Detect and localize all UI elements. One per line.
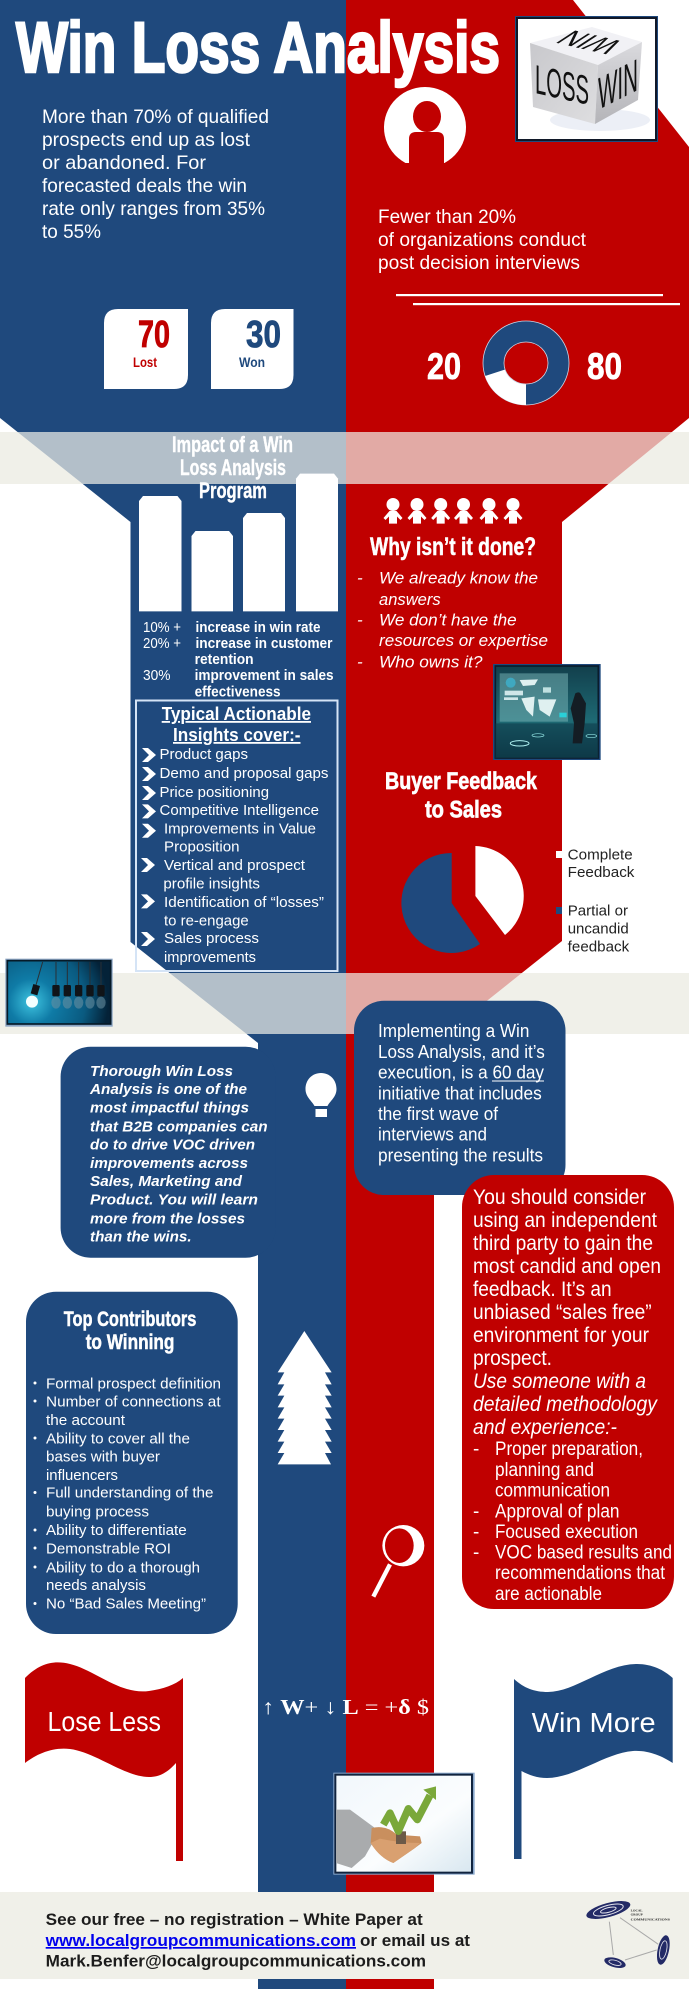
heading: impact program: Loss Analysis <box>180 455 286 480</box>
list: reasons: - <box>357 611 363 630</box>
text: impact percentages <box>143 620 334 700</box>
callout: independent third party: most candid and open <box>473 1255 661 1278</box>
text: impact percentages: 20% + <box>143 636 181 652</box>
text: post decision interviews: post decision interviews <box>378 252 580 274</box>
logo: local group communications <box>585 1897 672 1970</box>
callout: independent third party: planning and <box>495 1460 594 1481</box>
funnel: blue side <box>0 0 346 1989</box>
list: contributors: buying process <box>46 1504 149 1521</box>
list: insights <box>160 746 328 966</box>
text: post decision interviews: of organizations conduct <box>378 229 587 251</box>
intro text: lost prospects: prospects end up as lost <box>42 129 251 151</box>
callout: implementing timeline: interviews and <box>378 1125 487 1145</box>
panel: top contributors to winning <box>26 1292 238 1634</box>
legend: pie chart: Complete <box>568 847 633 864</box>
heading: impact program <box>172 432 293 503</box>
funnel: red side <box>346 0 689 1989</box>
callout: independent third party: You should consider <box>473 1186 646 1209</box>
intro text: lost prospects: to 55% <box>42 221 101 243</box>
list: reasons: answers <box>379 590 441 609</box>
callout: independent third party: Use someone with a <box>473 1370 646 1393</box>
flag: lose less: Lose Less <box>48 1706 161 1737</box>
callout: independent third party: are actionable <box>495 1584 602 1605</box>
list: insights: profile insights <box>163 876 260 893</box>
list: reasons: Who owns it? <box>379 652 483 672</box>
callout: independent third party: - <box>473 1439 479 1460</box>
callout: implementing timeline: initiative that includes <box>378 1083 542 1103</box>
text: post decision interviews <box>378 206 587 274</box>
list: reasons: We already know the <box>379 569 538 588</box>
flag: win more <box>514 1664 673 1859</box>
footer text: www.localgroupcommunications.com <box>45 1931 356 1950</box>
callout: independent third party: third party to gain the <box>473 1232 653 1255</box>
callout: independent third party: using an independent <box>473 1209 657 1232</box>
background bands <box>0 432 689 1034</box>
callout: implementing timeline <box>354 1001 566 1195</box>
text: impact percentages: effectiveness <box>195 684 281 700</box>
stat card: 30 won: Won <box>239 354 265 370</box>
callout: thorough win loss analysis: Thorough Win Loss <box>90 1064 233 1080</box>
callout: implementing timeline: execution, is a 60 day <box>378 1063 544 1083</box>
image: row of light bulbs <box>5 959 113 1027</box>
pie chart: buyer feedback <box>401 846 524 953</box>
list: reasons <box>357 569 548 672</box>
list: reasons: We don’t have the <box>379 611 517 630</box>
footer band <box>0 1892 689 1979</box>
legend: pie chart: feedback <box>568 938 630 955</box>
list: insights: Identification of “losses” <box>164 894 324 911</box>
callout: thorough win loss analysis: than the wins. <box>90 1229 192 1245</box>
list: reasons: - <box>357 652 363 672</box>
panel: typical actionable insights <box>136 700 338 971</box>
list: insights: improvements <box>164 949 256 966</box>
intro text: lost prospects: forecasted deals the win <box>42 175 247 197</box>
callout: independent third party: - <box>473 1501 479 1522</box>
list: contributors: Ability to do a thorough <box>46 1559 200 1576</box>
heading: typical actionable insights: Typical Actionable <box>162 704 311 724</box>
heading: buyer feedback to sales <box>385 768 538 824</box>
text: post decision interviews: Fewer than 20% <box>378 206 516 228</box>
heading: top contributors <box>64 1308 196 1354</box>
callout: independent third party: communication <box>495 1481 610 1502</box>
heading: typical actionable insights: Insights cover:- <box>173 725 300 745</box>
icon: row of people <box>384 498 522 524</box>
callout: implementing timeline: Implementing a Win <box>378 1021 529 1041</box>
text: impact percentages: improvement in sales <box>195 668 334 684</box>
image: hands holding growth arrow plant <box>333 1773 475 1875</box>
callout: independent third party: Approval of plan <box>495 1501 620 1522</box>
image: win loss dice: LOSS <box>535 58 589 115</box>
legend: pie chart <box>556 847 635 955</box>
footer text: See our free – no registration – White Paper at <box>46 1910 423 1929</box>
title: Win Loss Analysis <box>16 9 500 88</box>
flag: lose less <box>25 1662 183 1861</box>
list: insights: Vertical and prospect <box>164 857 306 874</box>
intro text: lost prospects: or abandoned. For <box>42 152 207 174</box>
translucent bands over funnel <box>0 432 689 1034</box>
list: contributors: Number of connections at <box>46 1393 221 1410</box>
callout: independent third party: Focused execution <box>495 1522 638 1543</box>
list: contributors: Ability to cover all the <box>46 1430 190 1447</box>
callout: thorough win loss analysis: improvements across <box>90 1156 248 1172</box>
callout: independent third party: prospect. <box>473 1347 552 1370</box>
list: insights: Price positioning <box>160 784 269 801</box>
list: insights: Proposition <box>164 838 240 855</box>
text: impact percentages: increase in customer <box>196 636 333 652</box>
callout: independent third party: Proper preparation, <box>495 1439 643 1460</box>
callout: thorough win loss analysis: do to drive VOC driven <box>90 1137 255 1153</box>
chevron bullets <box>141 748 156 946</box>
heading: impact program: Impact of a Win <box>172 432 293 457</box>
list: insights: Improvements in Value <box>164 821 316 838</box>
callout: independent third party: unbiased “sales free” <box>473 1301 652 1324</box>
footer text: or email us at <box>360 1931 470 1950</box>
list: contributors <box>34 1375 221 1613</box>
logo: local group communications: LOCAL <box>631 1909 643 1913</box>
icon: up arrow tree <box>278 1331 332 1464</box>
callout: independent third party: feedback. It’s an <box>473 1278 612 1301</box>
stat card: 70 lost: 70 <box>138 314 170 356</box>
callout: thorough win loss analysis <box>61 1047 276 1258</box>
list: contributors: bases with buyer <box>46 1449 160 1466</box>
stat card: 70 lost <box>104 309 188 389</box>
stat card: 70 lost: Lost <box>133 354 157 370</box>
legend: pie chart: Feedback <box>568 864 635 881</box>
list: contributors: Ability to differentiate <box>46 1522 187 1539</box>
bar chart <box>139 474 338 611</box>
callout: independent third party: detailed methodology <box>473 1393 658 1416</box>
text: impact percentages: 10% + <box>143 620 181 636</box>
callout: implementing timeline: the first wave of <box>378 1104 499 1124</box>
logo: local group communications: GROUP <box>631 1913 643 1917</box>
list: insights: Product gaps <box>160 746 248 763</box>
list: insights: Competitive Intelligence <box>160 802 319 819</box>
logo: local group communications: COMMUNICATIONS <box>631 1917 670 1921</box>
icon: magnifying glass <box>373 1525 424 1597</box>
list: contributors: Demonstrable ROI <box>46 1540 171 1557</box>
formula: ↑ W+ ↓ L = + δ $ <box>262 1695 429 1719</box>
intro text: lost prospects <box>42 106 269 243</box>
callout: independent third party: VOC based results and <box>495 1542 672 1563</box>
heading: impact program: Program <box>199 478 267 503</box>
list: contributors: influencers <box>46 1467 118 1484</box>
icon: light bulb <box>306 1073 336 1117</box>
list: contributors: needs analysis <box>46 1577 146 1594</box>
image: win loss dice: WIN <box>598 49 638 120</box>
callout: thorough win loss analysis: Analysis is one of the <box>89 1082 247 1098</box>
image: win loss dice: WIN <box>549 26 631 58</box>
flag: win more: Win More <box>532 1707 656 1738</box>
footer text: Mark.Benfer@localgroupcommunications.com <box>46 1952 426 1971</box>
callout: thorough win loss analysis: most impactful things <box>90 1101 249 1117</box>
donut chart: 20 / 80: 80 <box>587 346 622 387</box>
legend: pie chart: Partial or <box>568 903 628 920</box>
callout: implementing timeline: presenting the results <box>378 1145 543 1165</box>
list: contributors: Formal prospect definition <box>46 1375 221 1392</box>
list: insights: to re-engage <box>164 912 249 929</box>
callout: independent third party: and experience:- <box>473 1416 617 1439</box>
list: contributors: No “Bad Sales Meeting” <box>46 1596 206 1613</box>
stat card: 30 won: 30 <box>246 314 281 356</box>
list: insights: Sales process <box>164 930 259 947</box>
footer text <box>45 1910 470 1971</box>
image: data map and businessman <box>493 664 601 760</box>
image: win loss dice <box>515 16 658 142</box>
intro text: lost prospects: More than 70% of qualified <box>42 106 269 128</box>
callout: thorough win loss analysis: more from the losses <box>90 1211 245 1227</box>
callout: independent third party: recommendations that <box>495 1563 666 1584</box>
heading: why isn't it done: Why isn’t it done? <box>370 533 536 561</box>
heading: buyer feedback to sales: Buyer Feedback <box>385 768 538 795</box>
list: contributors: Full understanding of the <box>46 1485 214 1502</box>
list: insights: Demo and proposal gaps <box>160 765 328 782</box>
donut chart: 20 / 80: 20 <box>427 346 461 387</box>
icon: person <box>384 87 466 164</box>
callout: implementing timeline: Loss Analysis, and it’s <box>378 1042 545 1062</box>
callout: thorough win loss analysis: Sales, Marketing and <box>90 1174 243 1190</box>
heading: top contributors: to Winning <box>86 1331 174 1354</box>
list: reasons: - <box>357 569 363 588</box>
heading: top contributors: Top Contributors <box>64 1308 196 1331</box>
callout: independent third party: - <box>473 1542 479 1563</box>
callout: independent third party <box>462 1175 674 1609</box>
callout: independent third party: environment for your <box>473 1324 649 1347</box>
list: contributors: the account <box>46 1412 126 1429</box>
text: impact percentages: 30% <box>143 668 171 684</box>
text: impact percentages: retention <box>195 652 254 668</box>
callout: thorough win loss analysis: Product. You will learn <box>90 1193 258 1209</box>
text: impact percentages: increase in win rate <box>196 620 320 636</box>
callout: thorough win loss analysis: that B2B companies can <box>90 1119 268 1135</box>
intro text: lost prospects: rate only ranges from 35% <box>42 198 265 220</box>
donut chart: 20 / 80 <box>427 321 622 405</box>
legend: pie chart: uncandid <box>568 921 629 938</box>
list: reasons: resources or expertise <box>379 631 548 650</box>
heading: buyer feedback to sales: to Sales <box>425 796 502 824</box>
heading: typical actionable insights <box>162 704 311 745</box>
callout: independent third party: - <box>473 1522 479 1543</box>
stat card: 30 won <box>211 309 294 389</box>
